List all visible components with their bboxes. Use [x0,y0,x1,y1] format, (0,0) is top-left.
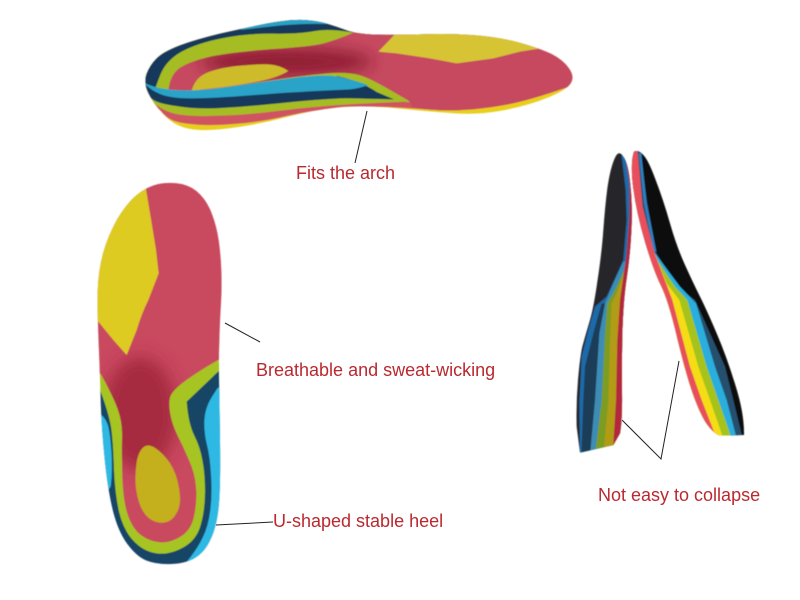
left blade mid blue stripe [590,261,626,450]
left blade [576,152,633,454]
lower red layer [151,98,460,126]
right blade cyan stripe [654,252,736,436]
insole: top view [96,182,222,565]
left blade blue stripe [578,154,632,454]
right blade blue line [640,153,655,252]
toe yellow pad [96,188,160,356]
label: u-shaped stable heel: U-shaped stable heel [273,511,443,531]
navy rim layer [144,19,406,109]
blue rim strip [143,76,368,98]
left cyan wall [98,413,112,490]
right blade navy stripe [637,151,743,436]
main red surface [168,32,574,111]
heel yellow pad [192,64,288,91]
label: not easy to collapse: Not easy to collapse [598,485,760,505]
arch navy lens [337,76,394,99]
right blade [630,150,745,436]
arrow lines: forked pointer [622,361,679,459]
arrow line: breathable [225,323,260,342]
toe yellow pad [378,30,543,63]
arrow line: arch [355,111,367,163]
left blade yellow stripe [604,267,628,448]
left blade green stripe [595,270,625,450]
right cyan wall [186,387,221,562]
green heel band [90,337,223,554]
arrow line: heel [216,522,273,525]
arch shading [103,357,177,470]
label: breathable and sweat-wicking: Breathable and sweat-wicking [256,360,495,380]
heel yellow pad [135,446,180,523]
shaded arch [200,48,373,75]
right blade green stripe [657,260,732,436]
right blade red edge [631,150,714,432]
lower green layer [151,98,406,117]
left blade red edge [612,162,632,445]
insole: side view with arch [144,19,574,131]
outer blue top sliver [240,19,328,30]
insoles: pair side edge view [576,150,745,454]
label: fits the arch: Fits the arch [296,163,395,183]
navy heel band [100,364,221,565]
green rim inside cup [155,30,430,103]
left blade navy stripe [581,302,606,453]
red surface [97,182,222,543]
right blade yellow stripe [648,252,723,436]
